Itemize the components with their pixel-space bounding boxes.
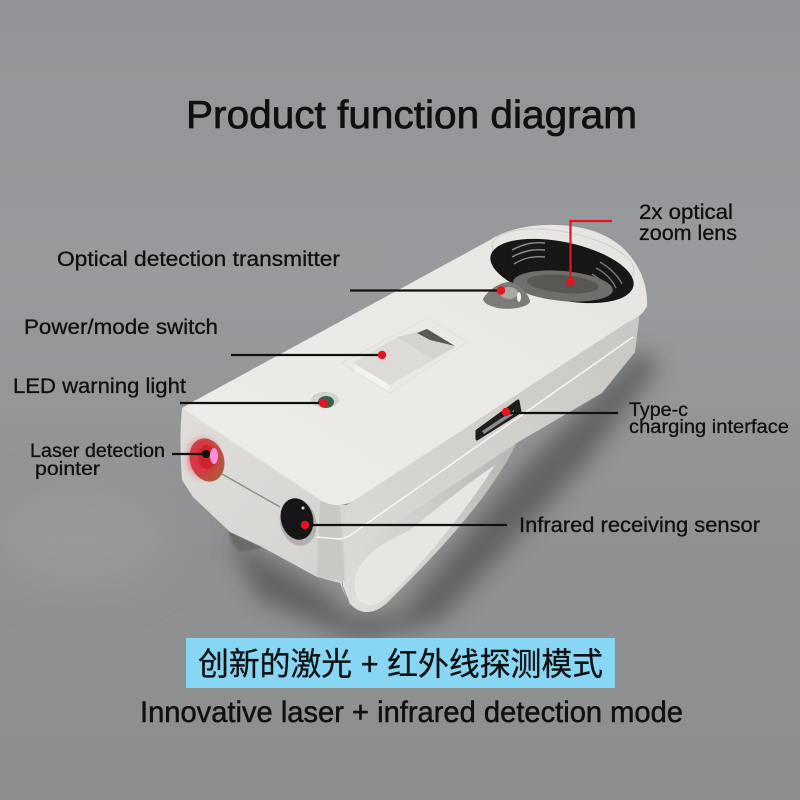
clip inner highlight xyxy=(354,465,495,605)
annotation: Type-c charging interface: charging interface xyxy=(629,417,789,438)
optical transmitter dome xyxy=(483,282,530,309)
annotation: 2x optical zoom lens xyxy=(566,201,737,286)
English subtitle: Innovative laser + infrared detection mode xyxy=(140,696,683,729)
device side band xyxy=(344,311,640,553)
annotation: 2x optical zoom lens: 2x optical xyxy=(639,201,733,224)
dark base under front wall xyxy=(228,530,262,552)
device shadow xyxy=(225,350,660,640)
device clip xyxy=(340,436,520,612)
power switch xyxy=(342,318,468,393)
laser pointer glow xyxy=(184,434,230,486)
annotation: infrared receiving sensor: Infrared receiving sensor xyxy=(519,514,760,537)
band seam xyxy=(317,337,633,539)
LED warning light xyxy=(311,392,339,408)
front corner shading xyxy=(317,501,345,582)
annotation: optical detection transmitter xyxy=(57,248,505,295)
annotation: Type-c charging interface xyxy=(502,400,789,438)
annotation: infrared receiving sensor xyxy=(301,514,760,537)
annotation: 2x optical zoom lens: zoom lens xyxy=(639,222,737,245)
device top face xyxy=(182,225,647,505)
annotation: laser detection pointer: Laser detection xyxy=(30,441,165,462)
Chinese banner: 创新的激光 + 红外线探测模式 xyxy=(198,646,603,682)
annotation: power/mode switch: Power/mode switch xyxy=(24,316,218,339)
annotation: Type-c charging interface: Type-c xyxy=(629,400,688,421)
annotation: LED warning light: LED warning light xyxy=(13,375,186,398)
product photo: detector device xyxy=(180,219,660,640)
annotation: laser detection pointer xyxy=(30,441,210,480)
device front face xyxy=(180,400,350,600)
Type-C port xyxy=(477,401,520,439)
Chinese banner xyxy=(186,638,615,688)
lens ring and lens xyxy=(485,219,639,315)
seam between laser and sensor xyxy=(222,474,280,507)
title: Product function diagram xyxy=(186,94,637,137)
annotation: LED warning light xyxy=(13,375,327,407)
infrared sensor xyxy=(274,494,322,550)
annotation: laser detection pointer: pointer xyxy=(35,459,101,480)
annotation: power/mode switch xyxy=(24,316,386,359)
annotation: optical detection transmitter: Optical detection transmitter xyxy=(57,248,340,271)
